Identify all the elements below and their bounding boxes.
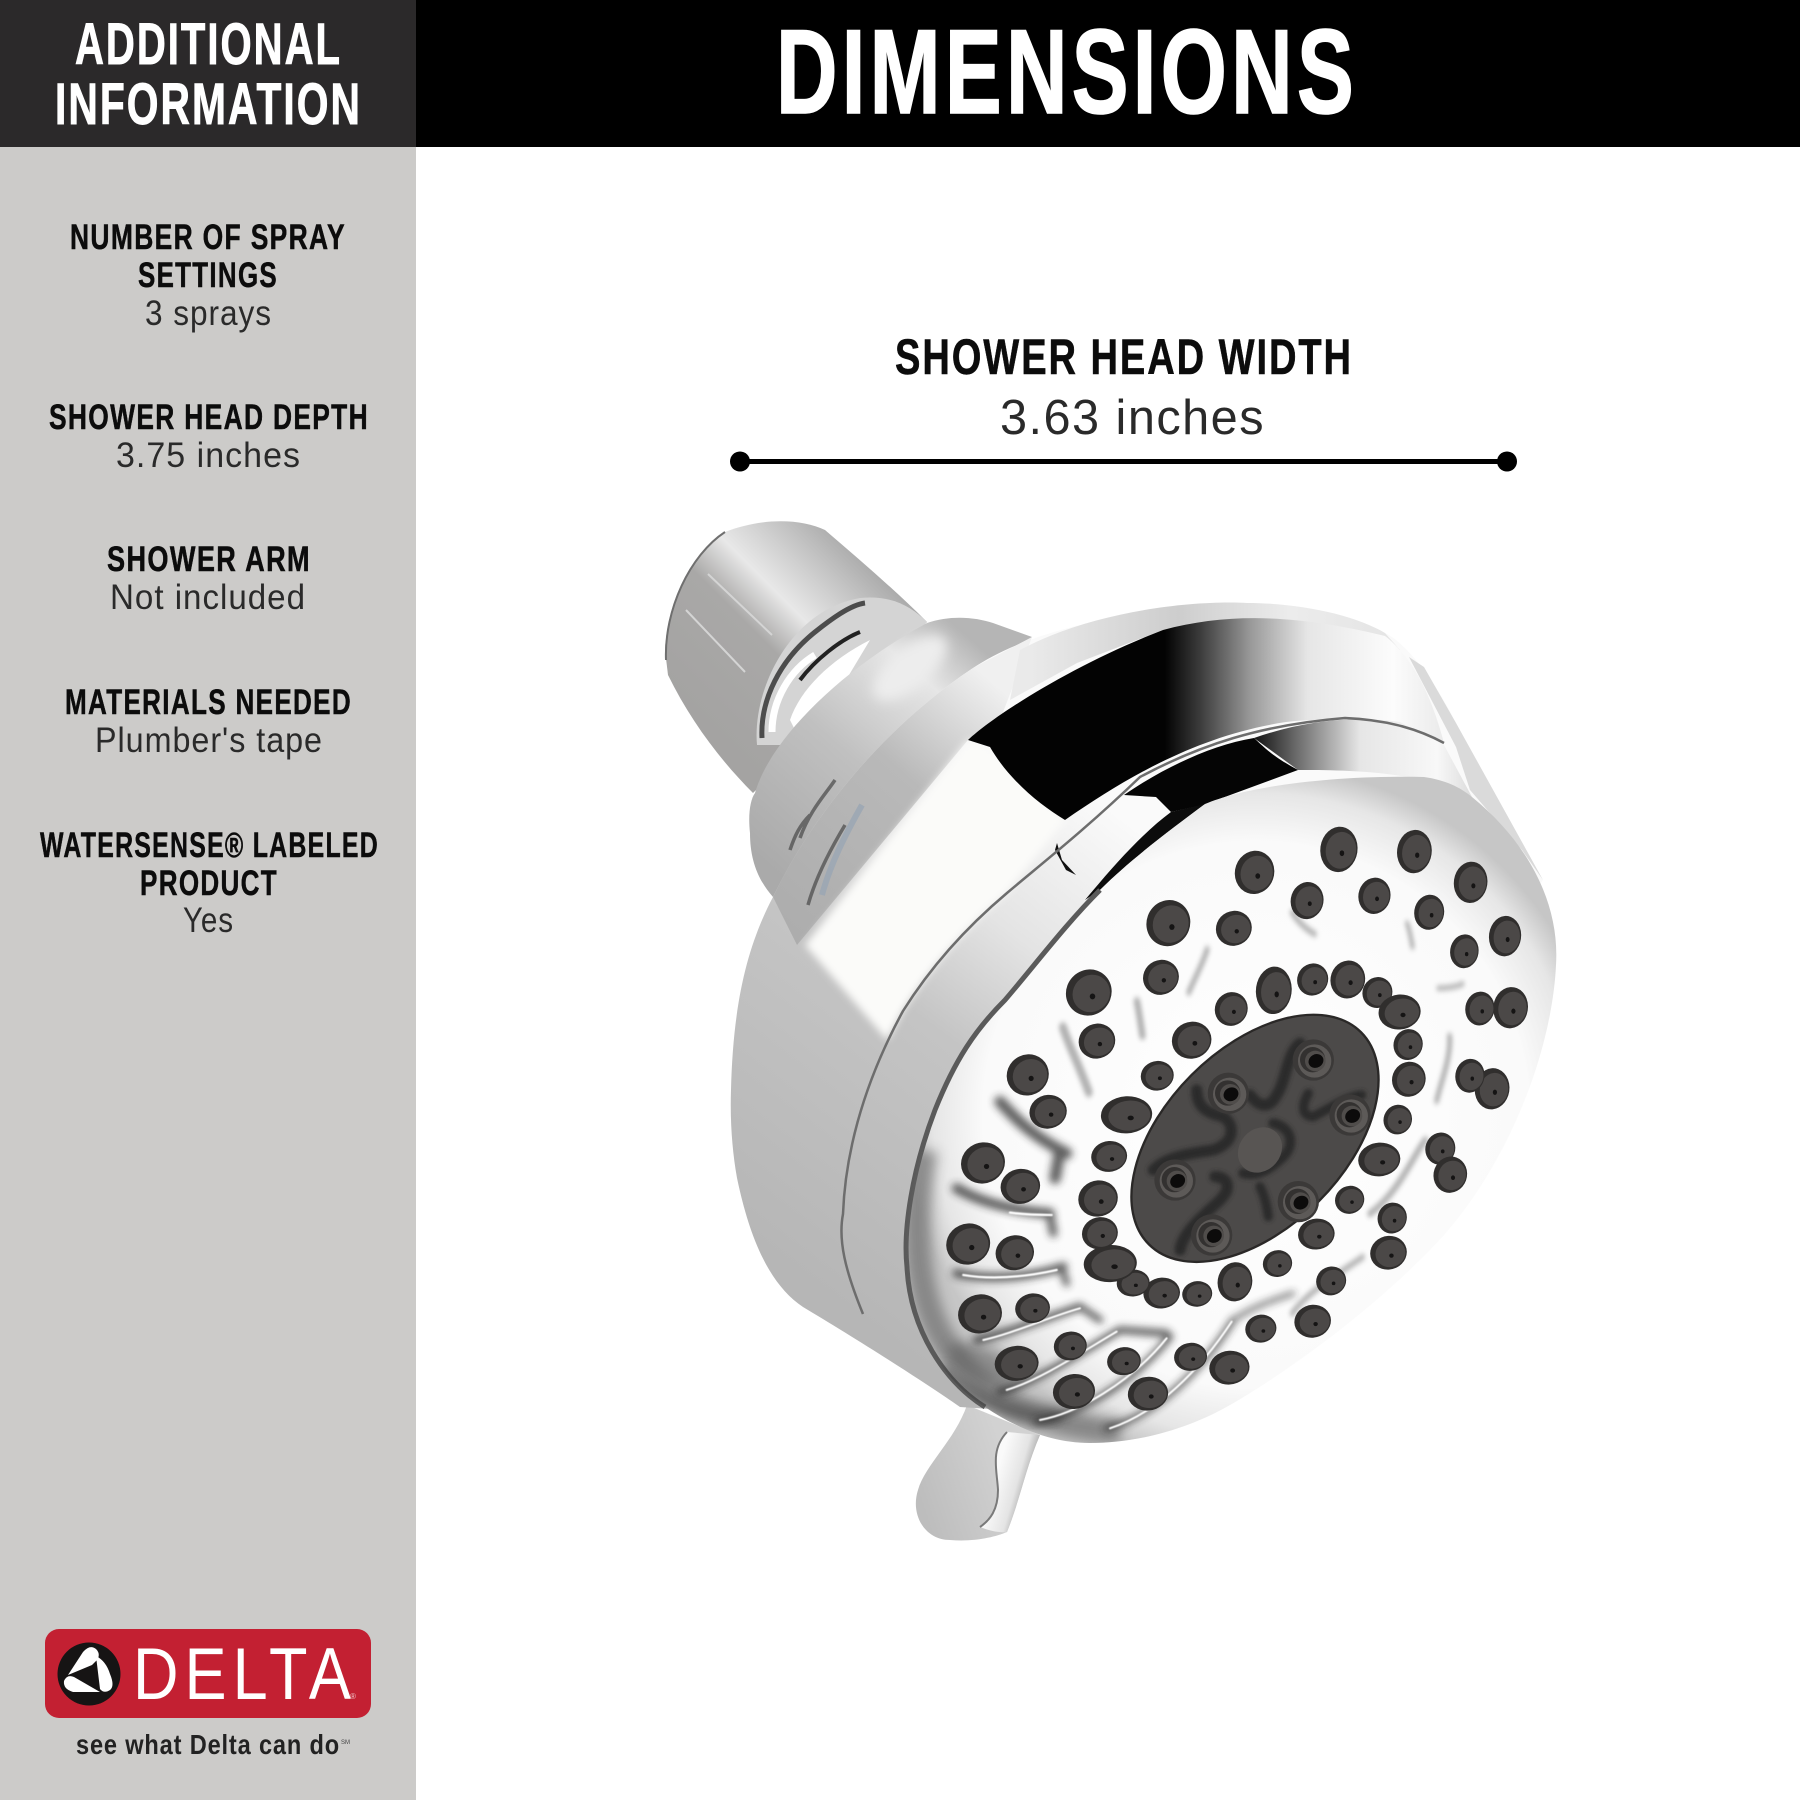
spec: materials needed: [65, 683, 352, 760]
panel: additional information header: ADDITIONAL: [75, 12, 342, 77]
connector ball joint: [757, 597, 927, 745]
spec: shower arm: SHOWER ARM: [107, 540, 311, 579]
connector collar: [749, 618, 1032, 897]
spec: number of spray settings: [70, 218, 346, 333]
heading: shower head width: 3.63 inches: [1000, 391, 1265, 445]
logo: delta: ®: [350, 1692, 356, 1701]
lever: [916, 1405, 1040, 1540]
body seam: [841, 718, 1444, 1314]
spec: shower arm: Not included: [110, 578, 306, 617]
spec: number of spray settings: NUMBER OF SPRAY: [70, 218, 346, 257]
tagline: SM: [341, 1740, 350, 1746]
face shading: [917, 1102, 1293, 1432]
logo: delta: DELTA: [133, 1634, 357, 1715]
spec: watersense labeled product: [40, 826, 379, 940]
spec: shower head depth: SHOWER HEAD DEPTH: [49, 398, 369, 437]
title: dimensions header: DIMENSIONS: [776, 5, 1358, 139]
spec: watersense labeled product: PRODUCT: [140, 864, 278, 903]
spec: shower arm: [107, 540, 311, 617]
spec: shower head depth: [49, 398, 369, 475]
spec: watersense labeled product: Yes: [183, 901, 234, 940]
panel: additional information header: INFORMATION: [55, 72, 362, 137]
heading: shower head width: SHOWER HEAD WIDTH: [895, 329, 1353, 385]
icon: delta emblem: [58, 1642, 120, 1706]
groove reflections upper right: [1063, 912, 1462, 1313]
arrow: width dimension line: [730, 452, 1517, 472]
panel: specification sidebar: [0, 147, 416, 1800]
spec: materials needed: Plumber's tape: [95, 721, 323, 760]
heading: shower head width: [895, 329, 1353, 445]
title: dimensions header: [416, 0, 1800, 147]
tagline: see what Delta can do: [76, 1729, 340, 1760]
spec: watersense labeled product: WATERSENSE® LABELED: [40, 826, 379, 865]
spec: materials needed: MATERIALS NEEDED: [65, 683, 352, 722]
spray nozzles: [939, 819, 1534, 1416]
spec: number of spray settings: 3 sprays: [145, 294, 272, 333]
spray face: [906, 777, 1556, 1443]
groove reflections lower left: [957, 1102, 1293, 1428]
logo: delta: [45, 1629, 371, 1760]
shower head body: [731, 603, 1543, 1420]
spec: shower head depth: 3.75 inches: [116, 436, 301, 475]
panel: additional information header: [0, 0, 416, 147]
spec: number of spray settings: SETTINGS: [138, 256, 278, 295]
product image: chrome shower head: [665, 521, 1556, 1540]
connector cylinder: [665, 521, 927, 793]
center disk: [1086, 969, 1424, 1308]
chrome reflections: [773, 603, 1543, 1040]
